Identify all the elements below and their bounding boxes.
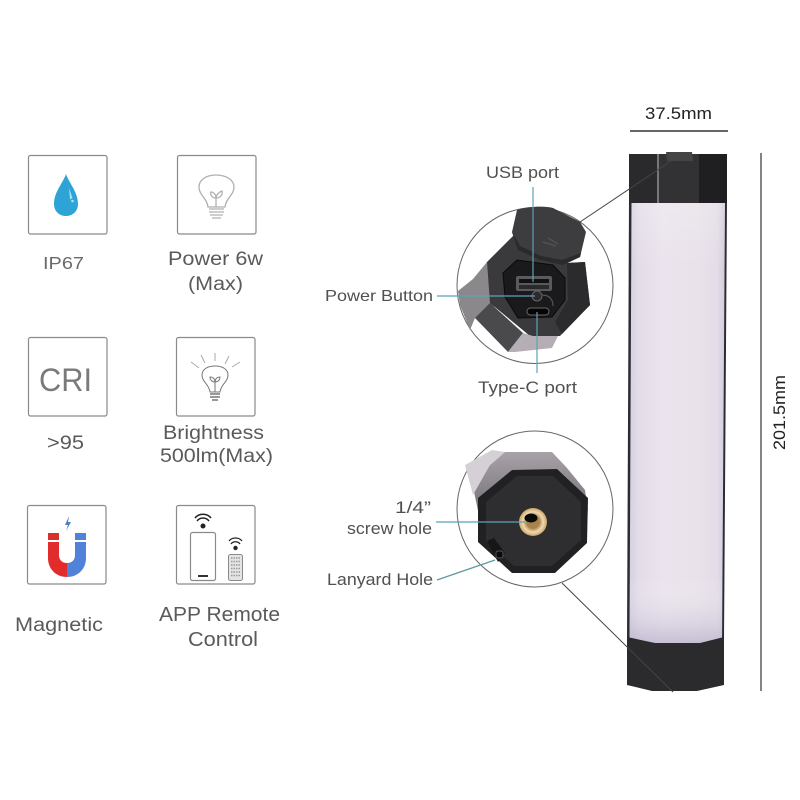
callout: Power Button: Power Button xyxy=(325,288,433,305)
label: Brightness 500lm(Max): 500lm(Max) xyxy=(160,446,273,467)
circle outline xyxy=(457,208,613,364)
side of light xyxy=(473,452,588,520)
dimension: width: 37.5mm xyxy=(645,105,712,123)
callout: Lanyard Hole: Lanyard Hole xyxy=(327,571,433,589)
icon box: CRI: CRI xyxy=(39,362,92,398)
callout lines to tube xyxy=(562,153,683,692)
lid xyxy=(512,207,586,265)
label: Brightness 500lm(Max) xyxy=(160,423,273,467)
panel: CRI feature xyxy=(28,338,107,454)
port plate xyxy=(503,260,565,318)
label: APP Remote Control: APP Remote xyxy=(159,604,280,626)
brass screw hole xyxy=(519,508,547,536)
label: APP Remote Control: Control xyxy=(188,629,258,651)
callout: screw hole: screw hole xyxy=(347,520,432,538)
detail circle: ports xyxy=(457,207,613,364)
callout: USB port xyxy=(486,164,559,282)
octagon end face xyxy=(478,469,588,573)
panel: IP67 feature xyxy=(28,156,107,273)
callout: USB port: USB port xyxy=(486,164,559,182)
label: Brightness 500lm(Max): Brightness xyxy=(163,423,264,444)
panel: power feature xyxy=(168,156,263,295)
power button xyxy=(532,291,553,306)
icon box: magnet xyxy=(28,506,106,584)
dark body xyxy=(487,236,590,336)
label: IP67: IP67 xyxy=(43,253,84,273)
callout: Lanyard Hole xyxy=(327,560,495,589)
callout: screw hole: 1/4” xyxy=(395,499,431,517)
lower light strip xyxy=(508,333,558,352)
callout: screw hole xyxy=(347,499,525,538)
label: Power 6w (Max) xyxy=(168,249,263,295)
bottom cap xyxy=(627,637,724,691)
icon box: water drop xyxy=(28,156,107,234)
callout: Type-C port xyxy=(478,312,577,397)
panel: app remote feature xyxy=(159,506,280,651)
tube body xyxy=(627,200,727,640)
panel: brightness feature xyxy=(160,338,273,467)
label: Magnetic: Magnetic xyxy=(15,615,103,636)
dimension: width xyxy=(630,105,728,131)
circle outline xyxy=(457,431,613,587)
label: Power 6w (Max): (Max) xyxy=(188,274,243,295)
Type-C port xyxy=(527,308,549,315)
label: APP Remote Control xyxy=(159,604,280,651)
lanyard hole xyxy=(487,538,505,562)
dimension: height: 201.5mm xyxy=(771,375,789,450)
grey left side of light xyxy=(458,262,497,330)
USB port xyxy=(516,276,552,291)
panel: magnetic feature xyxy=(15,506,106,636)
callout: Type-C port: Type-C port xyxy=(478,379,577,397)
hexagonal front side xyxy=(475,303,523,352)
icon box: glowing bulb xyxy=(176,338,255,416)
icon box: light bulb xyxy=(178,156,256,234)
detail circle: bottom xyxy=(457,431,613,587)
label: >95: >95 xyxy=(47,433,84,454)
top cap xyxy=(629,152,727,203)
label: Power 6w (Max): Power 6w xyxy=(168,249,263,270)
light tube product xyxy=(627,152,727,691)
icon box: phone and remote xyxy=(176,506,255,584)
